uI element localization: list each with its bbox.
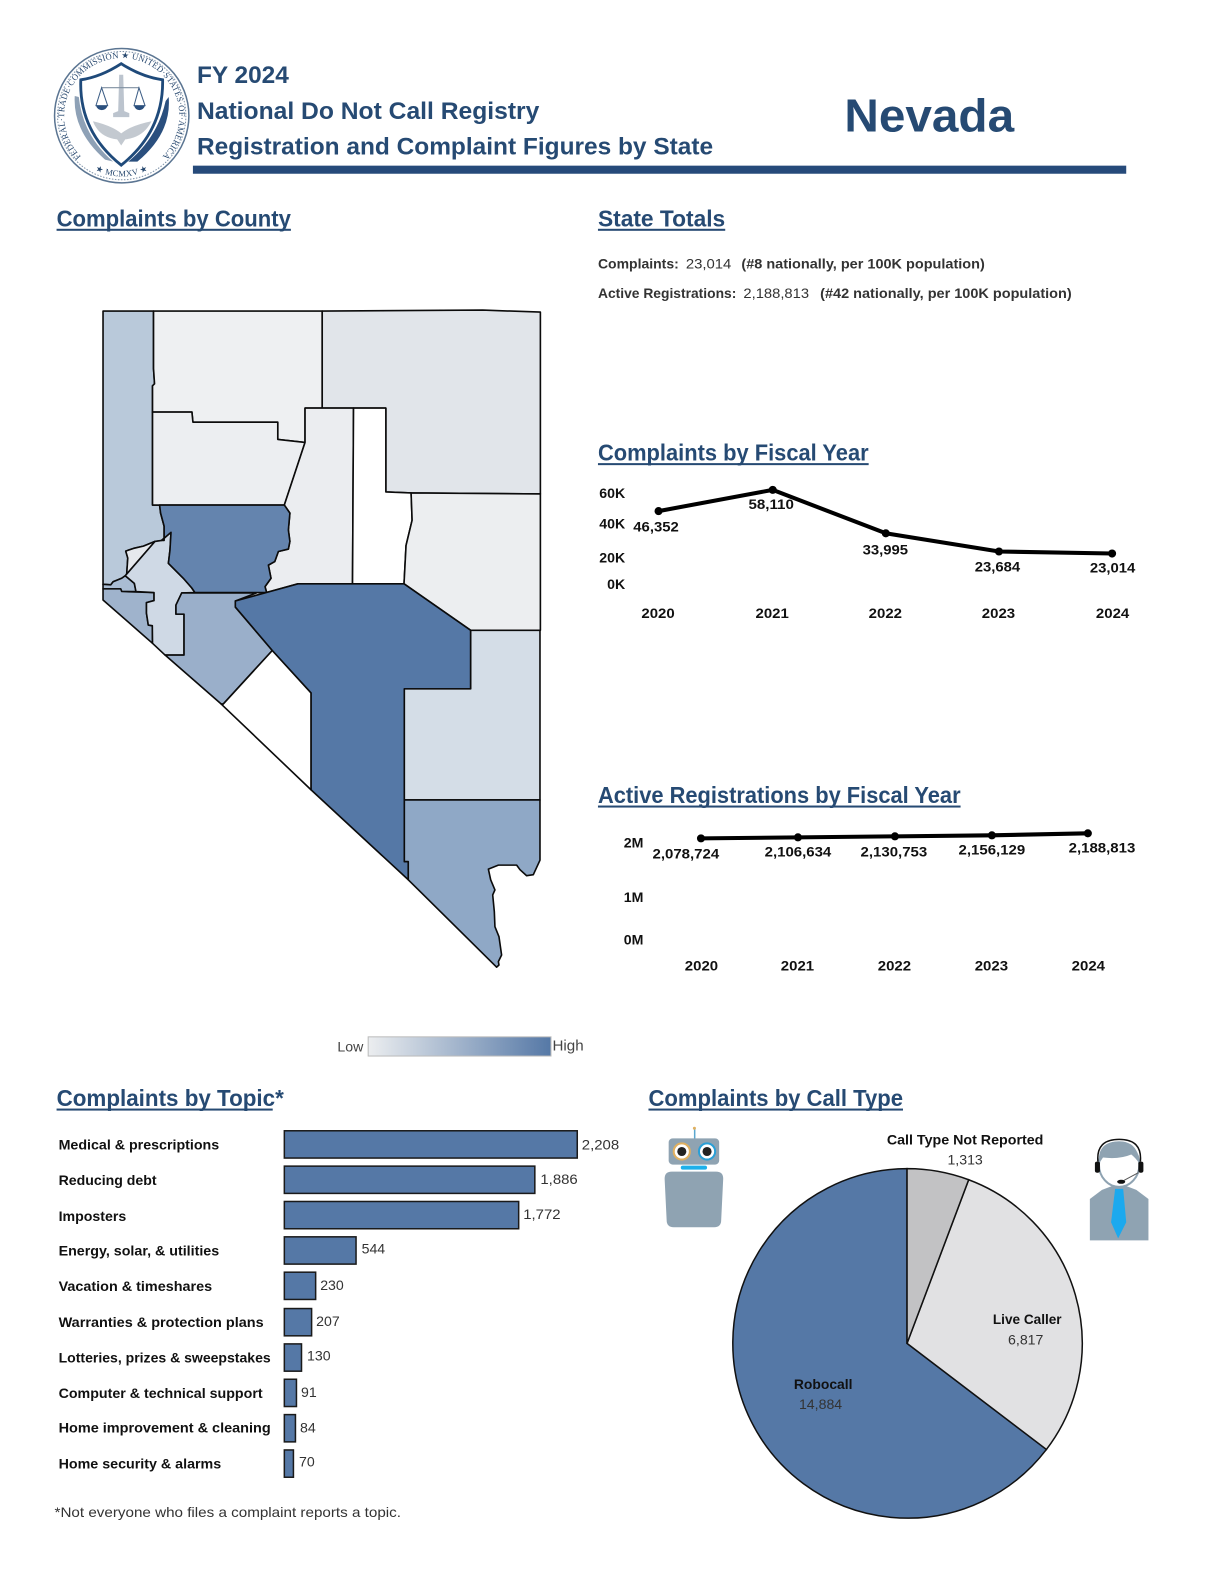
bar chart: complaints by topic: 1,886: [540, 1171, 578, 1187]
heading: state totals: State Totals: [598, 205, 725, 231]
line chart: complaints by fiscal year: 2023: [982, 605, 1015, 621]
bar chart: complaints by topic: [59, 1131, 619, 1477]
pie label: live caller: Live Caller: [993, 1311, 1062, 1327]
pie label: call type not reported: 1,313: [947, 1152, 983, 1168]
map: Nevada counties: [103, 310, 540, 967]
line chart: complaints by fiscal year: 40K: [599, 515, 626, 531]
heading: complaints by call type: Complaints by Call Type: [648, 1085, 903, 1111]
bar chart: complaints by topic: 2,208: [582, 1136, 619, 1152]
bar chart: complaints by topic: 207: [316, 1313, 340, 1329]
line chart: active registrations by fiscal year: 2023: [975, 958, 1008, 974]
slice: live caller: [907, 1180, 1082, 1449]
county: Carson City: [103, 576, 136, 592]
line chart: complaints by fiscal year: 23,684: [975, 559, 1020, 575]
county: Churchill: [160, 505, 290, 593]
heading: complaints by county: Complaints by County: [57, 205, 291, 231]
icon: FTC seal: ★ MCMXV ★: [96, 166, 146, 176]
map legend: Low: [337, 1038, 364, 1054]
state totals text: Complaints:: [598, 257, 679, 272]
title: Registration and Complaint Figures by State: [197, 134, 713, 161]
state totals text: [598, 256, 1072, 301]
pie label: live caller: [993, 1311, 1062, 1347]
line chart: complaints by fiscal year: 2024: [1096, 605, 1129, 621]
pie chart: complaints by call type: [733, 1169, 1082, 1518]
line chart: active registrations by fiscal year: 2024: [1072, 958, 1105, 974]
icon: FTC seal: FEDERAL·TRADE·COMMISSION ★ UNITED·STATES·OF·AMERICA: [58, 52, 185, 160]
heading: complaints by fiscal year: Complaints by Fiscal Year: [598, 440, 869, 466]
line chart: complaints by fiscal year: 2020: [641, 605, 675, 621]
title: FY 2024: [197, 62, 289, 89]
line chart: active registrations by fiscal year: 1M: [624, 889, 643, 905]
bar chart: complaints by topic: Home security & alarms: [59, 1456, 221, 1472]
county: Lander: [265, 408, 354, 593]
icon: robot: [665, 1127, 723, 1227]
slice: robocall: [733, 1169, 1046, 1518]
line chart: complaints by fiscal year: 33,995: [863, 542, 908, 558]
line chart: complaints by fiscal year: 60K: [599, 485, 626, 501]
bar chart: complaints by topic: 1,772: [523, 1206, 561, 1222]
bar chart: complaints by topic: Warranties & protection plans: [59, 1314, 264, 1330]
line chart: active registrations by fiscal year: 0M: [624, 931, 643, 947]
county: Humboldt: [153, 311, 322, 442]
pie label: call type not reported: Call Type Not Reported: [887, 1131, 1043, 1147]
header rule: [193, 166, 1126, 174]
heading: complaints by topic: Complaints by Topic*: [57, 1085, 285, 1111]
footnote: *Not everyone who files a complaint reports a topic.: [55, 1504, 401, 1520]
pie label: robocall: Robocall: [794, 1376, 852, 1392]
bar chart: complaints by topic: Energy, solar, & utilities: [59, 1243, 219, 1259]
bar chart: complaints by topic: 84: [300, 1419, 316, 1435]
bar chart: complaints by topic: 544: [362, 1240, 385, 1256]
title: National Do Not Call Registry: [197, 98, 540, 125]
county: Clark: [404, 800, 540, 967]
line chart: complaints by fiscal year: 0K: [607, 576, 626, 592]
bar chart: complaints by topic: Computer & technical support: [59, 1385, 263, 1401]
state totals text: 2,188,813: [743, 285, 809, 301]
bar chart: complaints by topic: 70: [299, 1454, 315, 1470]
map legend: [337, 1037, 584, 1056]
county: Lyon: [125, 532, 195, 655]
heading: active registrations by fiscal year: Active Registrations by Fiscal Year: [598, 782, 961, 808]
line chart: active registrations by fiscal year: [624, 829, 1135, 974]
pie label: call type not reported: [887, 1131, 1043, 1168]
line chart: complaints by fiscal year: 2021: [756, 605, 789, 621]
county: Eureka: [353, 408, 412, 584]
line chart: active registrations by fiscal year: 2,106,634: [765, 844, 831, 860]
line chart: complaints by fiscal year: 20K: [599, 550, 626, 566]
line chart: complaints by fiscal year: 23,014: [1090, 560, 1135, 576]
state totals text: (#42 nationally, per 100K population): [820, 286, 1072, 301]
pie label: live caller: 6,817: [1008, 1331, 1044, 1347]
county: Esmeralda: [221, 650, 311, 790]
line chart: complaints by fiscal year: 2022: [869, 605, 902, 621]
bar chart: complaints by topic: 230: [320, 1277, 344, 1293]
title: [197, 62, 713, 161]
pie label: robocall: 14,884: [799, 1396, 842, 1412]
map legend: High: [553, 1037, 584, 1054]
state totals text: (#8 nationally, per 100K population): [741, 257, 985, 272]
line chart: complaints by fiscal year: [599, 485, 1135, 621]
bar chart: complaints by topic: Imposters: [59, 1208, 126, 1224]
county: Douglas: [103, 589, 154, 643]
county: White Pine: [404, 493, 540, 630]
county: Pershing: [153, 412, 305, 505]
bar chart: complaints by topic: Home improvement & cleaning: [59, 1419, 271, 1435]
line chart: active registrations by fiscal year: 2,078,724: [653, 846, 719, 862]
icon: live caller: [1090, 1139, 1148, 1240]
bar chart: complaints by topic: Vacation & timeshares: [59, 1278, 212, 1294]
county: Mineral: [165, 593, 272, 704]
state totals text: 23,014: [686, 256, 731, 272]
bar chart: complaints by topic: 130: [307, 1348, 331, 1364]
line chart: active registrations by fiscal year: 2020: [685, 958, 718, 974]
line chart: active registrations by fiscal year: 2,156,129: [959, 842, 1025, 858]
line chart: active registrations by fiscal year: 2,130,753: [861, 844, 927, 860]
county: Elko: [322, 310, 540, 494]
county: Nye: [235, 584, 471, 880]
slice: call type not reported: [907, 1169, 969, 1343]
state totals text: Active Registrations:: [598, 286, 736, 301]
county: Storey: [125, 541, 155, 576]
line chart: active registrations by fiscal year: 2021: [781, 958, 814, 974]
bar chart: complaints by topic: Reducing debt: [59, 1172, 157, 1188]
state name: Nevada: [844, 89, 1015, 141]
line chart: complaints by fiscal year: 46,352: [633, 518, 679, 534]
bar chart: complaints by topic: 91: [301, 1384, 317, 1400]
bar chart: complaints by topic: Lotteries, prizes & sweepstakes: [59, 1350, 271, 1366]
line chart: complaints by fiscal year: 58,110: [748, 496, 794, 512]
county: Lincoln: [404, 630, 540, 800]
line chart: active registrations by fiscal year: 2,188,813: [1069, 840, 1135, 856]
bar chart: complaints by topic: Medical & prescriptions: [59, 1136, 219, 1152]
line chart: active registrations by fiscal year: 2022: [878, 958, 911, 974]
pie label: robocall: [794, 1376, 852, 1412]
county: Washoe: [103, 311, 164, 585]
line chart: active registrations by fiscal year: 2M: [624, 834, 643, 850]
